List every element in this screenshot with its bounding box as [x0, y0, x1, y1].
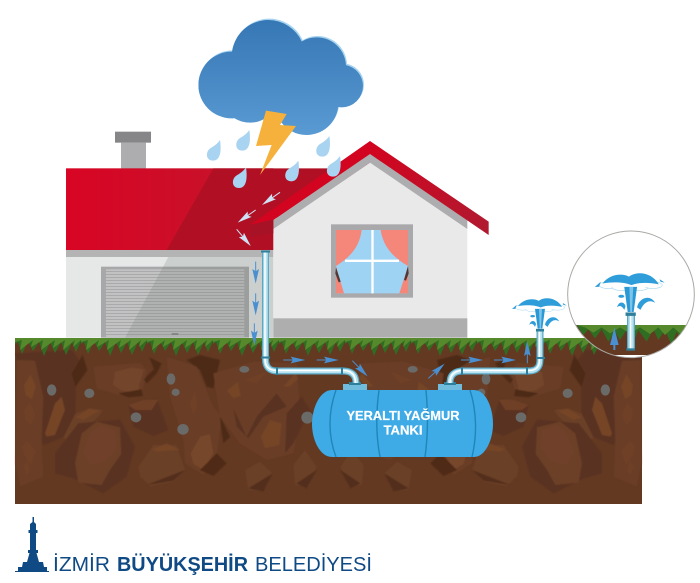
- tank flanges: [343, 382, 462, 390]
- left curtain: [336, 230, 362, 293]
- gable red roof: [250, 141, 489, 237]
- curtain ties: [335, 266, 409, 282]
- circle arrow: [610, 328, 619, 350]
- circle outline: [568, 231, 694, 358]
- lightning bolt: [256, 111, 296, 175]
- window: [331, 224, 413, 298]
- circle fountain: [595, 273, 665, 316]
- shadow over garage wall: [125, 257, 273, 338]
- fountain: [512, 298, 567, 331]
- gable roof shade: [250, 219, 273, 237]
- outlet pipe: [450, 330, 545, 383]
- storm cloud: [198, 18, 364, 137]
- cloud highlight: [199, 19, 364, 134]
- roof fascia: [66, 250, 273, 257]
- garage wall: [66, 257, 273, 338]
- tank ribs: [330, 390, 476, 457]
- soil texture right: [340, 350, 642, 493]
- gable base: [273, 318, 467, 338]
- soil block: [15, 338, 642, 504]
- tank label second line: TANKI: [384, 422, 422, 438]
- raindrops: [207, 130, 341, 188]
- tank label: YERALTI YAĞMUR: [346, 408, 460, 423]
- circle pipe: [626, 315, 635, 351]
- window mullions: [345, 230, 399, 293]
- cloud body: [198, 18, 363, 137]
- grass strip: [15, 338, 642, 360]
- roof arrows: [234, 190, 282, 248]
- tank body: [312, 390, 493, 457]
- logo text: BELEDİYESİ: BELEDİYESİ: [255, 553, 372, 576]
- magnified sprinkler circle: [567, 231, 697, 358]
- icon: clock tower: [15, 517, 49, 572]
- logo text: İZMİR: İZMİR: [53, 553, 110, 576]
- gable wall: [273, 163, 467, 338]
- soil texture left: [15, 350, 317, 493]
- flow arrows: [251, 262, 531, 381]
- chimney: [115, 132, 151, 189]
- circle ground: [576, 325, 686, 355]
- garage door: [101, 267, 249, 338]
- logo: İzmir Büyükşehir Belediyesi: [15, 517, 372, 576]
- circle background: [568, 231, 694, 358]
- house: [66, 132, 489, 338]
- logo text: BÜYÜKŞEHİR: BÜYÜKŞEHİR: [117, 553, 248, 576]
- main red roof: [66, 143, 370, 250]
- gable eave: [273, 153, 467, 229]
- inlet pipe: [261, 252, 356, 383]
- ground: soil and grass: [15, 338, 642, 504]
- underground tank: [312, 382, 493, 457]
- right curtain: [381, 230, 408, 293]
